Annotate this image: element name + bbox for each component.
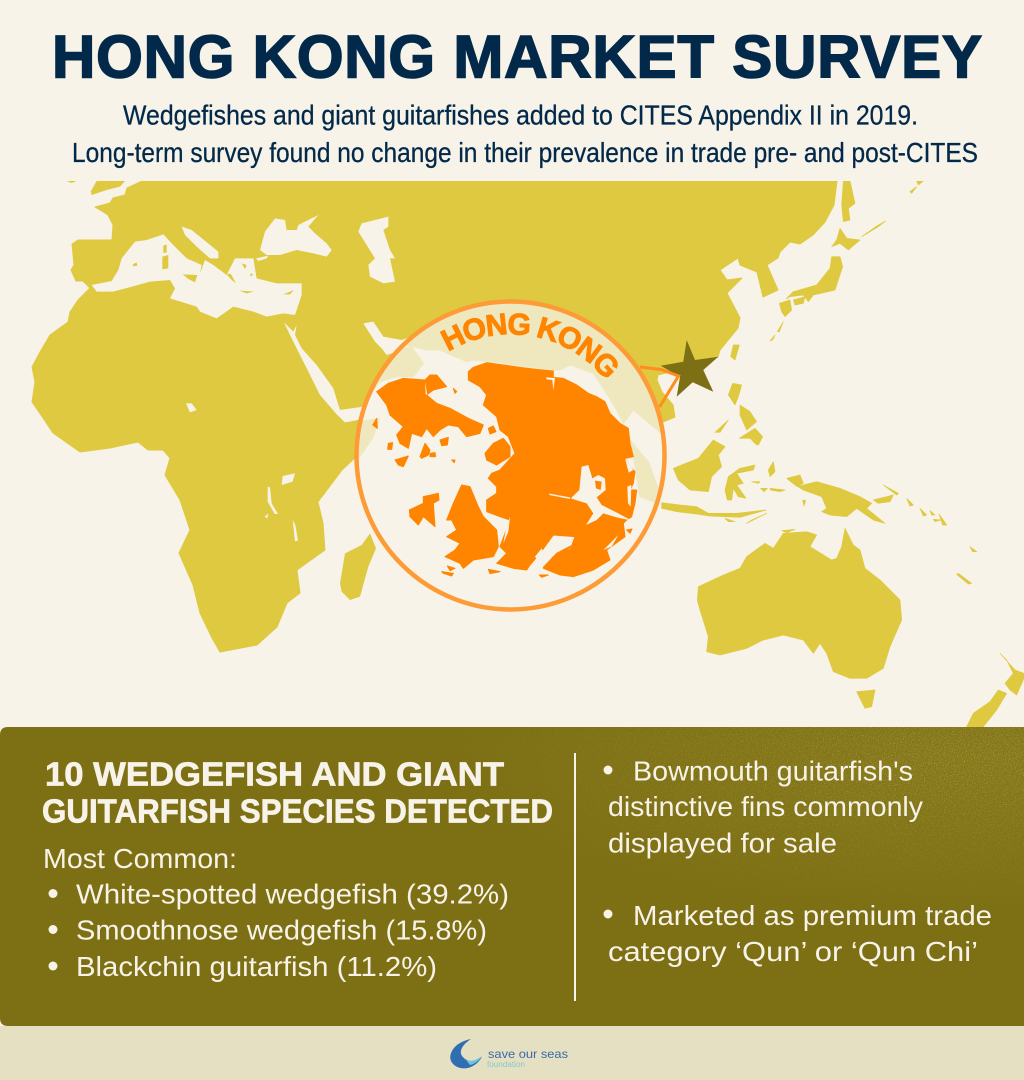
bullet: Bowmouth guitarfish: Bowmouth guitarfish's [633, 756, 913, 786]
Australia, Tasmania and New Zealand [697, 528, 1024, 727]
Japan, Sakhalin, Taiwan and the Philippines [715, 181, 923, 445]
bullet: Bowmouth guitarfish: displayed for sale [608, 828, 837, 858]
Indonesia and New Guinea [662, 440, 977, 584]
harbours and inlets [425, 377, 633, 562]
faded surrounding land [358, 304, 661, 503]
heading: species detected: GUITARFISH SPECIES DETECTED [42, 792, 553, 830]
harbour islet [595, 481, 602, 490]
subtitle [72, 100, 978, 168]
bullet: premium trade category: category ‘Qun’ or ‘Qun Chi’ [608, 936, 978, 967]
column divider [574, 753, 576, 1001]
most common species list: Blackchin guitarfish (11.2%) [76, 951, 437, 982]
locator star on Hong Kong [661, 340, 718, 397]
logo sub-label: foundation [487, 1060, 525, 1069]
title: HONG KONG MARKET SURVEY [52, 24, 982, 90]
Mediterranean islands [133, 244, 294, 294]
panel: species findings [0, 727, 1024, 1026]
logo: Save Our Seas Foundation [450, 1039, 568, 1069]
Madagascar [340, 533, 376, 600]
bullet: Bowmouth guitarfish: distinctive fins commonly [608, 791, 923, 822]
African lakes [265, 473, 322, 541]
Hong Kong inset circle [354, 299, 667, 612]
world map: Africa, Asia and Oceania [32, 181, 1024, 727]
most common species list: White-spotted wedgefish (39.2%) [76, 878, 509, 910]
heading: species detected: 10 WEDGEFISH AND GIANT [45, 756, 504, 792]
most common species list: Most Common: [43, 843, 237, 874]
seas and lakes cut from the land [92, 215, 412, 422]
most common species list [43, 843, 509, 982]
inset label: Hong Kong: HONG KONG [440, 312, 618, 378]
bullet: Bowmouth guitarfish [604, 756, 923, 858]
callout connector lines [640, 367, 678, 407]
most common species list: Smoothnose wedgefish (15.8%) [76, 914, 487, 946]
panel background [0, 727, 1024, 1026]
Hong Kong territory map [373, 363, 637, 577]
logo wordmark: save our seas [488, 1047, 568, 1061]
British Isles [67, 181, 125, 195]
subtitle: Wedgefishes and giant guitarfishes added to CITES Appendix II in 2019. [123, 100, 918, 130]
heading: species detected [42, 756, 553, 830]
footer band [0, 1026, 1024, 1080]
logo wave icon [450, 1039, 482, 1068]
circle outline [356, 302, 664, 610]
bullet: premium trade category [604, 900, 992, 967]
Afro-Eurasia landmass [32, 181, 837, 652]
circle background [356, 302, 664, 610]
bullet: premium trade category: Marketed as premium trade [633, 900, 992, 931]
